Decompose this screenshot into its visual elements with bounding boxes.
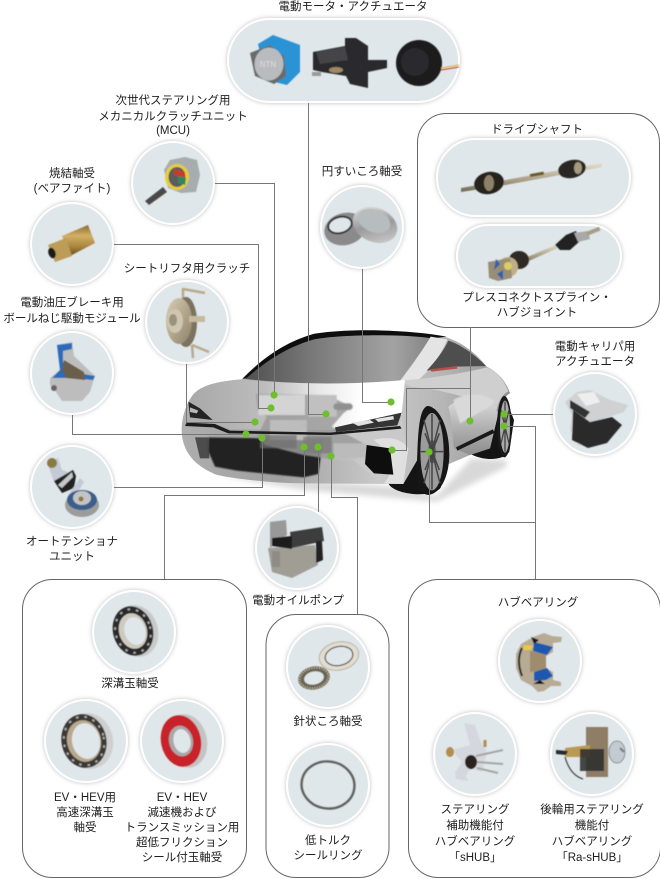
A pillar highlight (400, 337, 447, 381)
icon: black disc motor (396, 40, 459, 86)
caption: Ra-sHUB (540, 802, 644, 864)
caption: ultra low friction sealed ball bearing: EV・HEV (157, 792, 208, 804)
caption: auto tensioner unit: オートテンショナ (26, 535, 118, 548)
capsule: electric motor actuator (228, 19, 459, 102)
icon: blue motor: NTN (260, 60, 276, 69)
car ground shadow (215, 458, 507, 502)
caption: auto tensioner unit (26, 535, 118, 563)
circle: ball screw drive module (31, 332, 113, 414)
caption: sHUB: ハブベアリング (435, 834, 516, 848)
circle: tapered roller bearing (321, 186, 403, 268)
panel: needle bearing and seal ring group (266, 614, 389, 878)
front tire (388, 405, 449, 494)
circle: electric caliper actuator (554, 373, 636, 455)
left intake (195, 437, 209, 458)
caption: ultra low friction sealed ball bearing: 減速機および (148, 805, 217, 819)
panel: drive shaft group (418, 114, 660, 328)
car body (182, 331, 510, 484)
caption: seat lifter clutch: シートリフタ用クラッチ (124, 262, 250, 275)
caption: needle roller bearing: 針状ころ軸受 (294, 714, 362, 728)
circle: sintered bearing (31, 203, 113, 285)
trim line (185, 423, 402, 435)
caption: mechanical clutch unit: 次世代ステアリング用 (116, 93, 230, 107)
heading: drive shaft: ドライブシャフト (491, 122, 583, 136)
caption: electric caliper actuator: 電動キャリパ用 (555, 339, 635, 353)
icon: black actuator (312, 38, 387, 88)
caption: mechanical clutch unit (98, 93, 248, 137)
caption: sintered bearing (34, 166, 110, 195)
caption: ultra low friction sealed ball bearing: 超低フリクション (136, 835, 228, 849)
caption: press connect spline hub joint: プレスコネクトスプライン・ (462, 291, 612, 304)
circle: needle roller bearing (287, 626, 369, 708)
circle: ultra low friction sealed ball bearing (141, 700, 223, 782)
caption: EV HEV high speed deep groove ball bearing: EV・HEV用 (54, 792, 116, 804)
caption: press connect spline hub joint: ハブジョイント (497, 305, 577, 319)
caption: deep groove ball bearing: 深溝玉軸受 (101, 676, 159, 690)
caption: sHUB: 補助機能付 (446, 818, 504, 832)
caption: ultra low friction sealed ball bearing: トランスミッション用 (125, 822, 239, 834)
caption: Ra-sHUB: 「Ra-sHUB」 (556, 851, 628, 864)
caption: Ra-sHUB: 後輪用ステアリング (540, 802, 644, 816)
circle: deep groove ball bearing (93, 591, 175, 673)
car illustration (182, 330, 514, 502)
rear quarter panel (448, 399, 498, 455)
circle: EV HEV high speed deep groove ball bearing (45, 700, 127, 782)
shoulder highlight (400, 367, 508, 413)
caption: EV HEV high speed deep groove ball bearing (54, 792, 116, 834)
icon: blue motor (250, 35, 300, 85)
left headlight (188, 402, 213, 420)
caption: sHUB (435, 802, 516, 864)
circle: electric oil pump (256, 507, 338, 589)
caption: ultra low friction sealed ball bearing (125, 792, 239, 864)
caption: ball screw drive module (3, 295, 141, 325)
caption: auto tensioner unit: ユニット (49, 551, 95, 563)
caption: ball screw drive module: 電動油圧ブレーキ用 (20, 295, 124, 309)
circle: auto tensioner unit (31, 446, 113, 528)
hood (189, 379, 405, 430)
caption: electric oil pump: 電動オイルポンプ (252, 593, 344, 607)
heading: hub bearing: ハブベアリング (498, 595, 579, 609)
panel: hub bearing group (408, 580, 660, 878)
caption: EV HEV high speed deep groove ball bearing: 高速深溝玉 (56, 805, 114, 819)
circle: sHUB (434, 713, 516, 795)
panel: bearings group (22, 580, 246, 878)
side sill (456, 429, 495, 451)
caption: ultra low friction sealed ball bearing: シール付玉軸受 (142, 850, 222, 864)
right headlight (335, 413, 402, 432)
caption: Ra-sHUB: 機能付 (575, 818, 609, 832)
caption: sintered bearing: 焼結軸受 (49, 166, 95, 180)
location dots (242, 391, 508, 460)
rear tire (469, 393, 514, 459)
engine cutaway (256, 394, 370, 460)
circle: mechanical clutch unit (132, 142, 214, 224)
side highlight (453, 395, 495, 423)
caption: sHUB: ステアリング (440, 802, 510, 816)
capsule: press connect spline hub joint (457, 225, 621, 287)
caption: ball screw drive module: ボールねじ駆動モジュール (3, 311, 141, 325)
caption: press connect spline hub joint (462, 291, 612, 319)
heading: electric motor actuator: 電動モータ・アクチュエータ (279, 0, 427, 13)
circle: seat lifter clutch (146, 281, 228, 363)
caption: EV HEV high speed deep groove ball bearing: 軸受 (74, 820, 96, 834)
caption: mechanical clutch unit: メカニカルクラッチユニット (98, 110, 248, 123)
circle: hub bearing (499, 620, 581, 702)
front wheel (417, 406, 449, 495)
circle: low torque seal ring (287, 744, 369, 826)
caption: mechanical clutch unit: (MCU) (156, 125, 190, 137)
caption: electric caliper actuator (555, 339, 635, 368)
caption: Ra-sHUB: ハブベアリング (552, 834, 633, 848)
caption: sintered bearing: (ベアファイト) (34, 183, 110, 195)
caption: low torque seal ring: シールリング (294, 848, 363, 862)
caption: tapered roller bearing: 円すいころ軸受 (322, 164, 402, 178)
lower fascia (327, 415, 407, 483)
side window (427, 341, 486, 371)
connector lines (72, 102, 554, 614)
roof strip (243, 330, 447, 379)
caption: low torque seal ring: 低トルク (305, 834, 351, 847)
grille (208, 437, 323, 477)
caption: low torque seal ring (294, 834, 363, 862)
right intake (365, 445, 393, 475)
rear wheel (497, 396, 512, 457)
caption: electric caliper actuator: アクチュエータ (555, 355, 635, 368)
caption: sHUB: 「sHUB」 (448, 851, 502, 864)
windshield (243, 333, 431, 384)
circle: Ra-sHUB (551, 713, 633, 795)
capsule: drive shaft (437, 139, 630, 216)
